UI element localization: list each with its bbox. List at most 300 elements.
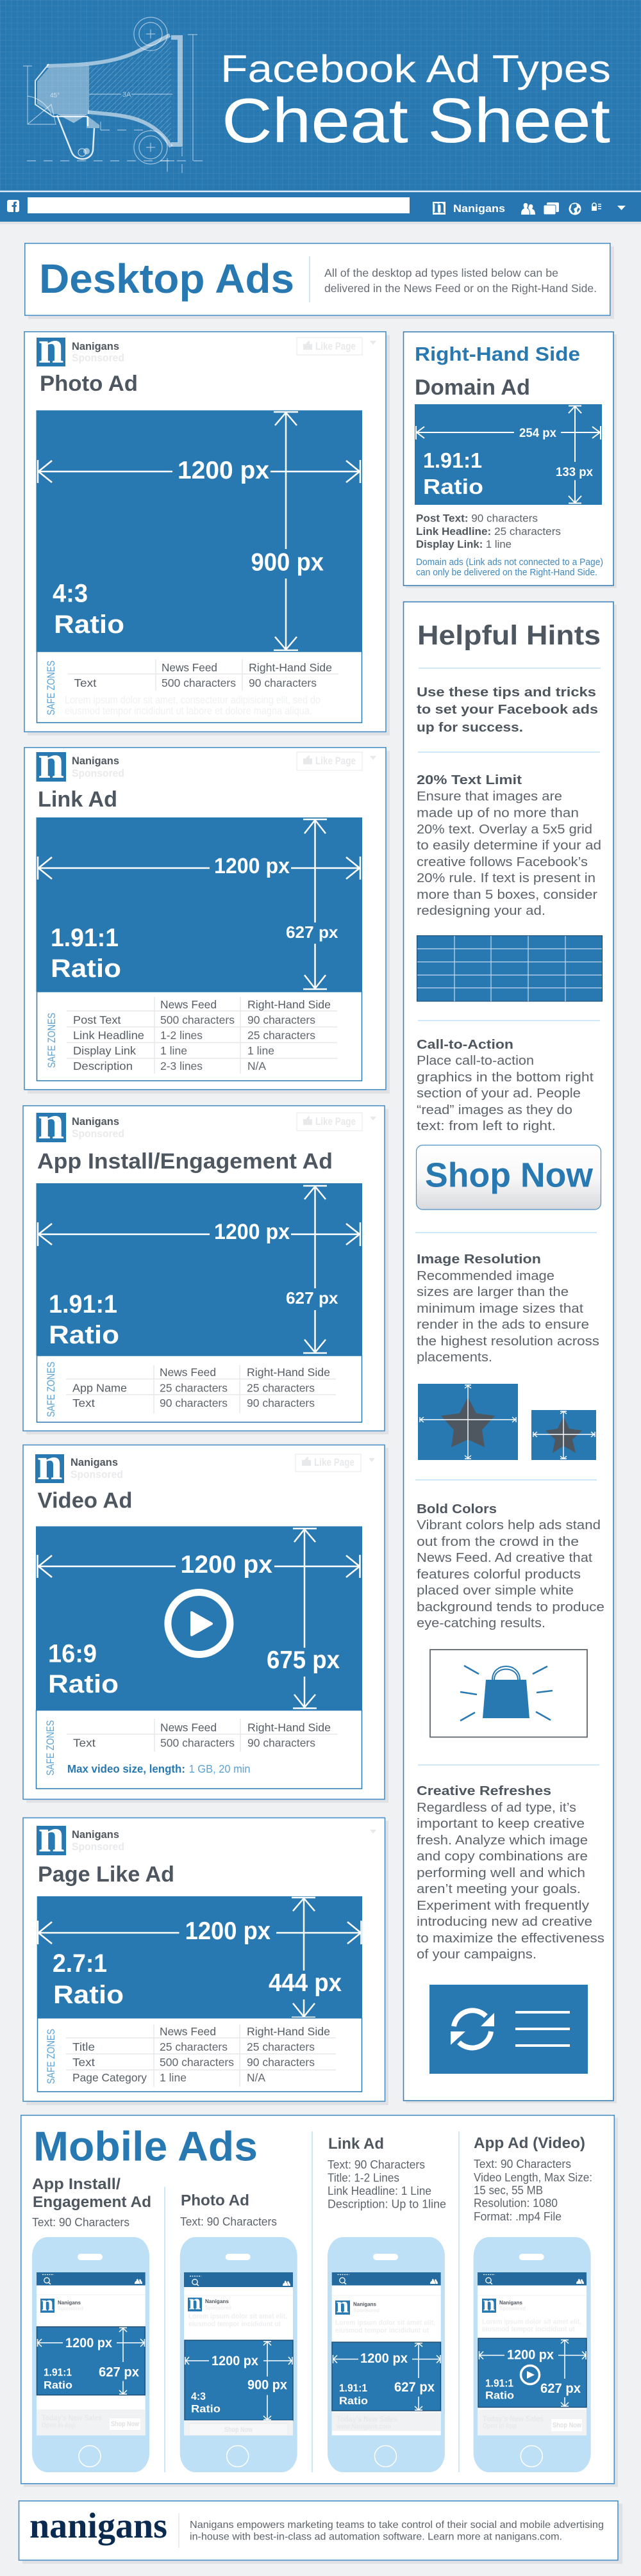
ratio: Ratio (53, 1981, 124, 2009)
ad image: 900 px (247, 2378, 287, 2393)
column: link heading: Text: 90 Characters (328, 2158, 425, 2171)
panel: page like ad (23, 1810, 388, 2105)
subheading: Domain Ad (415, 375, 530, 400)
phone nav bar (478, 2272, 587, 2285)
ratio (49, 1290, 119, 1349)
image area (36, 817, 362, 992)
width arrow: 1200 px (214, 854, 290, 878)
safe zones table: Text (73, 1736, 96, 1749)
panel: video ad (23, 1438, 388, 1803)
height arrow: 627 px (286, 923, 338, 942)
hint: image resolution: placements. (417, 1350, 492, 1365)
icon: messages (544, 202, 559, 215)
page name: Nanigans (72, 1116, 119, 1128)
specs text: Link Headline: 25 characters (416, 525, 561, 537)
safe zones table: Right-Hand Side (247, 1366, 330, 1379)
ad image: 1200 px (212, 2354, 258, 2368)
icon: logo: n (38, 1810, 65, 1862)
hint: creative refreshes: of your campaigns. (417, 1948, 537, 1962)
search box (28, 197, 410, 213)
page name: Nanigans (72, 1829, 119, 1841)
panel: nanigans footer (19, 2501, 622, 2564)
intro text (324, 267, 597, 295)
ad image: 1200 px (507, 2347, 554, 2363)
width arrow: 1200 px (181, 1551, 272, 1579)
safe zones table: 1 line (160, 2071, 187, 2084)
ad image: 1.91:1 (485, 2377, 513, 2389)
hint: call-to-action: Place call-to-action (417, 1054, 534, 1068)
safe zones table: Page Category (72, 2071, 147, 2084)
safe zones table: Right-Hand Side (247, 2025, 330, 2038)
page name (71, 1457, 123, 1481)
ad header: Nanigans (499, 2299, 522, 2306)
hint: bold colors: eye-catching results. (417, 1616, 545, 1630)
safe zones table: 2-3 lines (160, 1060, 203, 1072)
page name (72, 341, 124, 364)
safe zones table: SAFE ZONES (44, 1720, 56, 1776)
column: link heading: Link Ad (328, 2135, 384, 2153)
safe zones table: News Feed (160, 998, 217, 1011)
like button (297, 338, 362, 355)
like button: Like Page (315, 755, 356, 767)
safe zones table: 90 characters (247, 1013, 315, 1026)
page name: Nanigans (71, 1457, 118, 1468)
page name: Sponsored (72, 1128, 124, 1140)
ad header: Sponsored (353, 2307, 379, 2313)
safe zones table (37, 652, 362, 723)
ad footer (332, 2413, 441, 2431)
phone nav bar (37, 2272, 146, 2285)
safe zones table: 1-2 lines (160, 1029, 203, 1042)
hint: 20% text limit: 20% text. Overlay a 5x5 grid (417, 823, 592, 837)
like button (297, 752, 362, 770)
ratio: Ratio (49, 1321, 119, 1349)
ad footer: Open in App (483, 2422, 517, 2430)
page name: Sponsored (72, 767, 124, 779)
ad image: Ratio (44, 2379, 72, 2391)
ad footer: Shop Now (224, 2426, 253, 2434)
ad header: eiusmod tempor incididunt ut (188, 2320, 281, 2328)
safe zones table: SAFE ZONES (45, 1362, 57, 1417)
heading: Photo Ad (40, 372, 138, 396)
column: photo heading: Text: 90 Characters (180, 2215, 277, 2228)
ad image (37, 2327, 145, 2395)
note: can only be delivered on the Right-Hand Side. (416, 568, 597, 578)
ad image: 627 px (540, 2381, 581, 2396)
column: app video heading: Video Length, Max Size: (474, 2171, 592, 2184)
safe zones table: 500 characters (160, 1736, 235, 1749)
safe zones table: 500 characters (160, 2056, 234, 2069)
page name: Sponsored (72, 1841, 124, 1853)
icon: globe (569, 202, 581, 215)
page name: Sponsored (72, 352, 124, 364)
heading: Page Like Ad (38, 1862, 174, 1887)
safe zones table (37, 2018, 362, 2092)
intro text: delivered in the News Feed or on the Right-Hand Side. (324, 282, 597, 295)
note (416, 557, 603, 578)
hint: 20% text limit: made up of no more than (417, 806, 579, 820)
ad header (188, 2291, 287, 2328)
heading: Mobile Ads (33, 2123, 258, 2169)
panel: photo ad (24, 322, 390, 735)
ad footer (478, 2409, 587, 2435)
ad header (40, 2292, 83, 2315)
safe zones table: Post Text (73, 1013, 121, 1026)
hint: creative refreshes: and copy combinations are (417, 1850, 588, 1864)
column: app video heading: 15 sec, 55 MB (474, 2184, 543, 2197)
height arrow (267, 1529, 340, 1708)
safe zones table: Right-Hand Side (247, 1721, 331, 1734)
height arrow (286, 819, 338, 989)
hint: call-to-action: graphics in the bottom right (417, 1071, 594, 1085)
intro: to set your Facebook ads (417, 702, 598, 717)
ad header: Nanigans (205, 2298, 229, 2304)
ad image: 1200 px (360, 2351, 408, 2366)
ad image: 4:3 (191, 2390, 206, 2402)
column: app install heading: App Install/ (32, 2176, 121, 2193)
icon: logo: n (38, 322, 64, 373)
width arrow (38, 1220, 360, 1246)
ad header: Sponsored (499, 2305, 526, 2311)
logo wordmark: nanigans (29, 2506, 167, 2546)
ad header: Sponsored (205, 2304, 231, 2311)
safe zones table: App Name (72, 1381, 127, 1394)
note: Domain ads (Link ads not connected to a Page) (416, 557, 603, 568)
ratio: 1.91:1 (49, 1290, 117, 1318)
ad footer: Shop Now (553, 2422, 581, 2429)
heading: Video Ad (37, 1489, 132, 1513)
hint: creative refreshes: Regardless of ad type, it’s (417, 1801, 576, 1815)
hint: image resolution: sizes are larger than the (417, 1285, 569, 1299)
title: Facebook Ad Types (221, 47, 611, 90)
hint: 20% text limit: creative follows Facebook’s (417, 855, 588, 869)
column: link heading: Description: Up to 1line (328, 2198, 446, 2211)
hint: image resolution: Image Resolution (417, 1252, 541, 1267)
intro: Use these tips and tricks (417, 685, 596, 700)
intro text: All of the desktop ad types listed below can be (324, 267, 558, 279)
width arrow: 1200 px (185, 1917, 271, 1945)
hint: call-to-action: Call-to-Action (417, 1037, 513, 1052)
page name: Nanigans (72, 341, 119, 352)
safe zones table: Text (74, 677, 97, 689)
hint: image resolution: minimum image sizes that (417, 1302, 583, 1316)
heading: Helpful Hints (417, 620, 601, 651)
safe zones table: Right-Hand Side (249, 661, 332, 674)
shop now button: Shop Now (425, 1156, 594, 1194)
width arrow: 1200 px (178, 457, 269, 484)
safe zones table: 500 characters (160, 1013, 235, 1026)
icon: privacy lock (592, 203, 601, 211)
hint: call-to-action: text: from left to right. (417, 1119, 556, 1133)
ad image (185, 2340, 293, 2420)
safe zones table: 500 characters (162, 677, 236, 689)
safe zones table: Lorem ipsum dolor sit amet, consectetur adipisicing elit, sed do (65, 694, 320, 706)
width arrow (38, 1917, 362, 1945)
phone: link (328, 2237, 445, 2472)
icon: 5x5 grid (417, 935, 603, 1001)
icon: blueprint megaphone: 3A (122, 91, 131, 99)
hint: creative refreshes: Creative Refreshes (417, 1784, 551, 1798)
hint: 20% text limit: redesigning your ad. (417, 904, 545, 918)
column: app install heading: Text: 90 Characters (32, 2216, 129, 2229)
ad image: Ratio (485, 2390, 514, 2401)
safe zones table: Link Headline (73, 1029, 144, 1042)
hint: bold colors: placed over simple white (417, 1584, 574, 1598)
page name: Sponsored (71, 1469, 123, 1481)
column: link heading: Link Headline: 1 Line (328, 2185, 431, 2197)
like button: Like Page (315, 1116, 356, 1128)
ratio: Ratio (51, 955, 121, 983)
ad image: 1.91:1 (339, 2382, 367, 2394)
ratio (53, 579, 124, 639)
hint: creative refreshes: important to keep creative (417, 1817, 585, 1831)
ad image: 1.91:1 (44, 2367, 72, 2379)
panel: app install ad (23, 1097, 388, 1434)
safe zones table (36, 1710, 362, 1789)
like button: Like Page (315, 341, 356, 352)
hint: bold colors: background tends to produce (417, 1600, 604, 1614)
ad header: Sponsored (58, 2305, 83, 2311)
width arrow: 1200 px (214, 1220, 290, 1244)
safe zones table: 25 characters (247, 1381, 315, 1394)
safe zones table: Text (72, 1397, 95, 1409)
safe zones table: News Feed (162, 661, 217, 674)
column: app video heading: Text: 90 Characters (474, 2158, 571, 2170)
hint: call-to-action: “read” images as they do (417, 1103, 572, 1117)
ratio: Ratio (48, 1670, 119, 1698)
safe zones table: 25 characters (247, 1029, 315, 1042)
hint: bold colors: out from the crowd in the (417, 1535, 579, 1549)
ratio (48, 1640, 119, 1698)
safe zones table (37, 992, 362, 1081)
ad image (332, 2342, 441, 2411)
phone: photo (180, 2237, 297, 2472)
width arrow (416, 426, 601, 440)
hint: bold colors: News Feed. Ad creative that (417, 1551, 592, 1565)
icon: shopping bag (430, 1650, 587, 1737)
image area (37, 1896, 362, 2018)
hint: 20% text limit: Ensure that images are (417, 789, 562, 803)
company blurb: Nanigans empowers marketing teams to take control of their social and mobile advertising (190, 2520, 604, 2531)
icon: friends (521, 203, 535, 215)
heading: App Install/Engagement Ad (37, 1149, 333, 1174)
height arrow: 627 px (286, 1288, 338, 1308)
shop now button (417, 1145, 601, 1210)
icon: logo: n (38, 736, 64, 789)
ratio: 1.91:1 (51, 924, 119, 952)
ratio (51, 924, 121, 983)
specs text: Display Link: 1 line (416, 538, 512, 550)
icon: refresh (429, 1985, 588, 2074)
safe zones table: News Feed (160, 1721, 217, 1734)
hint: 20% text limit (417, 773, 601, 918)
safe zones table: SAFE ZONES (45, 2029, 57, 2084)
title (221, 47, 611, 156)
ad header: n (483, 2292, 495, 2315)
ad image: 1200 px (65, 2336, 112, 2350)
ad header: Nanigans (58, 2299, 81, 2306)
hint: 20% text limit: more than 5 boxes, consider (417, 888, 597, 902)
phone nav bar (184, 2272, 293, 2287)
ad header: eiusmod tempor incididunt ut (335, 2327, 429, 2334)
hint: creative refreshes: to maximize the effectiveness (417, 1932, 604, 1946)
hint: call-to-action: section of your ad. People (417, 1087, 581, 1101)
hint: 20% text limit: to easily determine if your ad (417, 839, 601, 853)
nav label: Nanigans (453, 202, 505, 215)
heading: Desktop Ads (39, 256, 294, 302)
page name: Nanigans (72, 755, 119, 767)
safe zones table: SAFE ZONES (46, 1013, 58, 1068)
phone: app video (474, 2237, 591, 2472)
icon: play button (168, 1593, 230, 1654)
ad header: Nanigans (353, 2301, 376, 2308)
specs text (416, 513, 561, 550)
like button (297, 1113, 362, 1131)
hint: bold colors (417, 1502, 604, 1630)
like button (296, 1454, 361, 1472)
safe zones table: 90 characters (247, 1736, 315, 1749)
ratio (423, 448, 483, 498)
header banner (0, 0, 641, 191)
column: photo heading: Photo Ad (181, 2192, 249, 2209)
icon: blueprint megaphone (23, 17, 207, 177)
ad image: Ratio (191, 2402, 221, 2415)
hint: bold colors: Bold Colors (417, 1502, 497, 1516)
heading: Right-Hand Side (415, 343, 580, 365)
safe zones table: 90 characters (247, 2056, 315, 2069)
company blurb: in-house with best-in-class ad automation software. Learn more at nanigans.com. (190, 2532, 562, 2543)
safe zones table: Max video size, length: (67, 1762, 185, 1775)
safe zones table: 1 line (247, 1044, 274, 1057)
safe zones table: 1 line (160, 1044, 187, 1057)
height arrow: 900 px (251, 548, 324, 577)
icon: large star image (418, 1384, 518, 1460)
icon: nanigans logo: n (433, 194, 445, 217)
safe zones table: N/A (247, 2071, 265, 2084)
hint: image resolution: the highest resolution across (417, 1334, 599, 1349)
title: Cheat Sheet (222, 85, 610, 156)
column: app install heading: Engagement Ad (33, 2194, 151, 2211)
safe zones table: 1 GB, 20 min (189, 1762, 251, 1775)
ad footer: Today’s New Sales (42, 2413, 102, 2422)
safe zones table: Right-Hand Side (247, 998, 331, 1011)
image area (36, 410, 362, 652)
ad header: n (336, 2292, 349, 2318)
hint: image resolution (417, 1252, 599, 1365)
safe zones table: 25 characters (160, 1381, 228, 1394)
safe zones table: eiusmod tempor incididunt ut labore et dolore magna aliqua. (65, 705, 312, 717)
column: app video heading: App Ad (Video) (474, 2135, 585, 2152)
panel: helpful hints (404, 602, 617, 2103)
ad footer: Open in App (42, 2422, 76, 2429)
ad image: 627 px (99, 2365, 139, 2380)
hint: image resolution: render in the ads to ensure (417, 1318, 589, 1332)
hint: bold colors: Vibrant colors help ads stand (417, 1518, 601, 1532)
safe zones table: 90 characters (160, 1397, 228, 1409)
company blurb (190, 2520, 604, 2543)
panel: right-hand side domain ad (404, 332, 617, 588)
hint: creative refreshes: introducing new ad creative (417, 1915, 592, 1929)
height arrow: 444 px (269, 1969, 342, 1997)
ad footer: Today’s New Sales (337, 2415, 397, 2424)
safe zones table: Title (72, 2040, 95, 2053)
safe zones table: Text (72, 2056, 95, 2069)
ad header (482, 2292, 581, 2333)
page name (72, 755, 124, 779)
width arrow: 254 px (519, 427, 556, 440)
panel: mobile ads (21, 2115, 618, 2487)
safe zones table: Description (73, 1060, 133, 1072)
safe zones table: 90 characters (249, 677, 317, 689)
image area (36, 1183, 362, 1356)
ratio: 1.91:1 (423, 448, 482, 472)
width arrow (38, 854, 360, 880)
ad image: 627 px (394, 2380, 435, 2395)
ad header: Lorem ipsum dolor sit amet elit, (335, 2319, 435, 2327)
safe zones table: Display Link (73, 1044, 136, 1057)
ad header (335, 2292, 435, 2334)
safe zones table: N/A (247, 1060, 266, 1072)
ratio: Ratio (54, 611, 124, 639)
safe zones table: News Feed (160, 2025, 216, 2038)
like button: Like Page (314, 1457, 354, 1468)
ratio (53, 1949, 124, 2009)
ad footer: www.Nanigans.com (336, 2423, 391, 2431)
hint: image resolution: Recommended image (417, 1269, 554, 1283)
hint: creative refreshes: Experiment with frequently (417, 1899, 589, 1913)
safe zones table (37, 1356, 362, 1422)
hint: creative refreshes (417, 1784, 604, 1962)
height arrow: 133 px (556, 466, 593, 479)
icon: dropdown (617, 206, 626, 210)
ad header: Lorem ipsum dolor sit amet elit, (188, 2313, 287, 2320)
height arrow (251, 412, 324, 650)
icon: blueprint megaphone: 45° (50, 92, 60, 99)
intro: up for success. (417, 720, 523, 735)
hint: call-to-action (417, 1037, 594, 1133)
safe zones table: 25 characters (247, 2040, 315, 2053)
hint: creative refreshes: aren’t meeting your goals. (417, 1882, 581, 1896)
column: link heading: Title: 1-2 Lines (328, 2172, 399, 2185)
icon: logo: n (38, 1097, 64, 1149)
column: app video heading: Resolution: 1080 (474, 2197, 558, 2210)
intro (417, 685, 598, 735)
image area (36, 1526, 362, 1710)
ad header: n (188, 2291, 201, 2314)
height arrow (286, 1186, 338, 1353)
panel: link ad (24, 736, 390, 1094)
width arrow (38, 457, 360, 484)
phone: app install (32, 2237, 149, 2472)
height arrow (556, 406, 593, 504)
ad footer: Shop Now (111, 2420, 139, 2428)
heading: Link Ad (38, 787, 117, 812)
hint: 20% text limit: 20% Text Limit (417, 773, 522, 787)
column: link heading (328, 2135, 446, 2211)
page name (72, 1116, 124, 1140)
ad footer (37, 2409, 146, 2435)
safe zones table: News Feed (160, 1366, 216, 1379)
ad image: Ratio (339, 2395, 368, 2407)
ratio: 4:3 (53, 579, 88, 607)
ad image (478, 2338, 587, 2408)
height arrow: 675 px (267, 1646, 340, 1674)
ad footer (184, 2420, 293, 2435)
hint: creative refreshes: fresh. Analyze which image (417, 1834, 588, 1848)
column: app video heading: Format: .mp4 File (474, 2210, 562, 2223)
safe zones table: SAFE ZONES (45, 660, 57, 715)
ratio: 2.7:1 (53, 1949, 107, 1978)
